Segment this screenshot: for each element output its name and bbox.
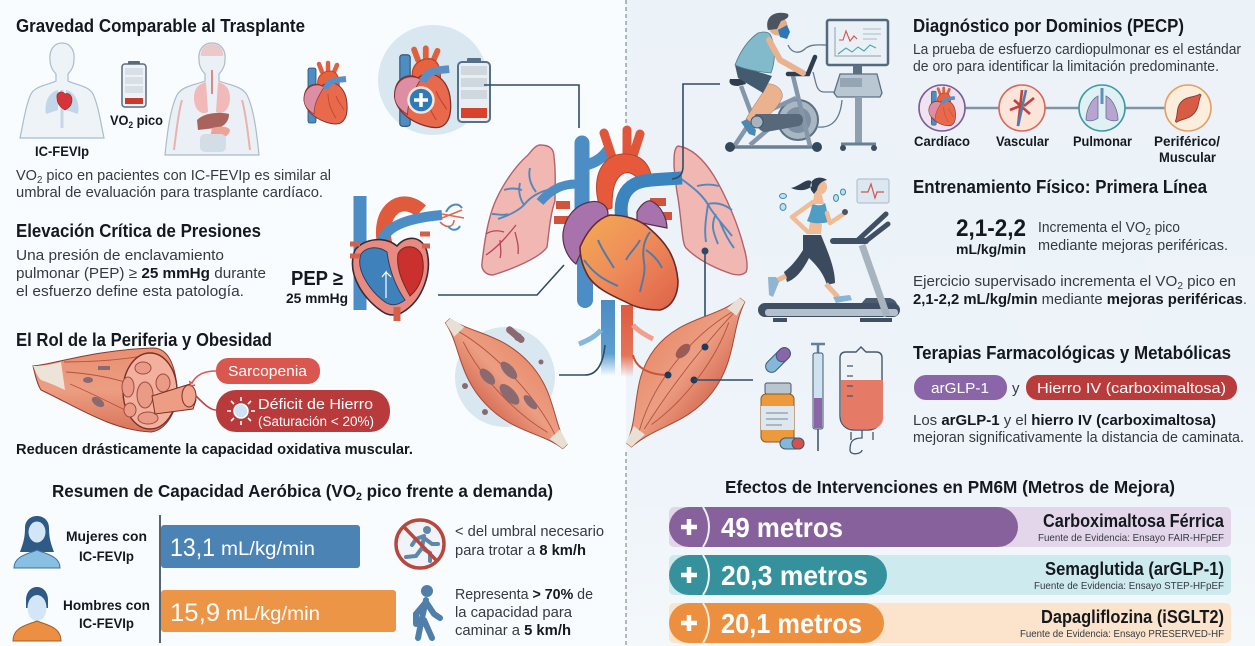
text: VO2 pico descripcion: VO <box>16 167 38 184</box>
panel: terapias farmacologicas <box>913 343 1244 446</box>
panel: resumen capacidad aerobica <box>13 481 604 643</box>
bar: hombres 15,9: mL/kg/min <box>226 604 320 625</box>
label: VO2 pico: pico <box>133 112 163 128</box>
label: hombres: IC-FEVIp <box>79 615 134 631</box>
panel: efectos de intervenciones <box>669 477 1231 643</box>
text: line 1: Una presión de enclavamiento <box>16 247 224 264</box>
row: carboximaltosa: 49 metros <box>721 512 843 543</box>
text: incrementa: Incrementa el VO <box>1038 219 1155 236</box>
icon: body with organs <box>165 43 259 155</box>
heading: elevacion: Elevación Crítica de Presiones <box>16 221 261 241</box>
text: representa: caminar a 5 km/h <box>455 622 571 639</box>
icon: low battery <box>122 61 146 107</box>
text: umbral trotar <box>455 523 604 559</box>
row: semaglutida: Fuente de Evidencia: Ensayo STEP-HFpEF <box>1034 580 1224 592</box>
stat: 2,1-2,2 <box>956 215 1026 257</box>
connector: left muscle to vessel <box>559 345 605 375</box>
icon: no running <box>396 520 444 568</box>
coronary vessels <box>584 232 662 292</box>
icon: small heart <box>304 63 347 124</box>
label: vascular: Vascular <box>996 134 1050 149</box>
text: terapias line 1: Los arGLP-1 y el hierro IV (carboximaltosa) <box>913 412 1216 429</box>
monitor <box>827 20 888 65</box>
pill: sarcopenia <box>216 358 320 384</box>
text: ejercicio supervisado: pico en <box>1183 273 1236 290</box>
stat: 2,1-2,2: 2,1-2,2 <box>956 215 1026 242</box>
label: periferico <box>1154 134 1220 165</box>
icon: man avatar <box>13 587 61 641</box>
stat: 2,1-2,2: mL/kg/min <box>956 241 1026 257</box>
illustration: treadmill runner <box>758 178 900 320</box>
pill: deficit de hierro: Déficit de Hierro <box>258 396 373 413</box>
text: line 3: el esfuerzo define esta patología. <box>16 283 244 300</box>
atria <box>563 202 608 264</box>
label: VO2 pico: 2 <box>129 120 133 130</box>
connectors with bullets <box>672 84 720 179</box>
domain connector line <box>965 107 1165 109</box>
pill: hierro IV: Hierro IV (carboximaltosa) <box>1037 380 1226 397</box>
text: ejercicio supervisado <box>913 273 1247 308</box>
row: dapagliflozina <box>669 603 1231 643</box>
heading: gravedad: Gravedad Comparable al Trasplante <box>16 16 305 36</box>
descending vessels <box>601 300 615 376</box>
lung right <box>674 146 747 275</box>
illustration: central heart and lungs <box>482 84 747 377</box>
icon: left muscle medallion <box>426 300 588 466</box>
icon: periferico <box>1165 85 1211 131</box>
text: representa <box>455 586 593 639</box>
vessels in lungs <box>492 168 734 248</box>
bar: mujeres 13,1 <box>161 525 360 568</box>
bar: hombres 15,9 <box>161 590 396 632</box>
text: umbral trotar: < del umbral necesario <box>455 523 604 540</box>
icon: woman avatar <box>14 516 60 568</box>
connector: right muscle to therapy <box>694 379 753 381</box>
panel: entrenamiento fisico <box>913 177 1247 308</box>
heading: entrenamiento: Entrenamiento Físico: Primera Línea <box>913 177 1208 197</box>
heading: resumen: Resumen de Capacidad Aeróbica (VO <box>52 481 364 501</box>
text: y: y <box>1012 380 1020 397</box>
text: incrementa <box>1038 219 1228 254</box>
panel: rol de la periferia y obesidad <box>16 330 413 458</box>
arrow: sarcopenia <box>190 371 216 386</box>
great vessels <box>577 260 593 300</box>
bike frame <box>730 145 817 149</box>
lung left <box>482 145 555 275</box>
panel: diagnostico por dominios <box>913 16 1241 165</box>
label: 25 mmHg: 25 mmHg <box>286 290 348 306</box>
heading: terapias: Terapias Farmacológicas y Metabólicas <box>913 343 1231 363</box>
text: reducen: Reducen drásticamente la capacidad oxidativa muscular. <box>16 441 413 458</box>
pill: hierro IV <box>1026 375 1237 400</box>
text: ejercicio supervisado: 2,1-2,2 mL/kg/min mediante mejoras periféricas. <box>913 291 1247 308</box>
label: hombres <box>63 597 150 631</box>
row: carboximaltosa: Carboximaltosa Férrica <box>1043 511 1225 531</box>
label: cardiaco: Cardíaco <box>914 134 970 149</box>
text: umbral trotar: para trotar a 8 km/h <box>455 542 586 559</box>
cyclist <box>746 84 782 124</box>
connector: PEP to heart <box>438 265 564 295</box>
text: VO2 pico descripcion: 2 <box>37 175 43 186</box>
text: incrementa: mediante mejoras periféricas. <box>1038 237 1228 254</box>
icon: walking person <box>416 585 440 638</box>
heading: resumen: pico frente a demanda) <box>362 481 553 501</box>
row: semaglutida: Semaglutida (arGLP-1) <box>1045 559 1224 579</box>
label: mujeres: IC-FEVIp <box>79 548 134 564</box>
text: ejercicio supervisado: Ejercicio supervisado incrementa el VO <box>913 273 1175 290</box>
connector: medallion to heart <box>484 85 579 128</box>
icon: muscle cross section <box>33 348 196 432</box>
text: ejercicio supervisado: 2 <box>1177 281 1183 292</box>
text: representa: la capacidad para <box>455 604 573 621</box>
pill: sarcopenia: Sarcopenia <box>228 363 308 380</box>
icon: cardiaco <box>919 85 965 131</box>
icon: right muscle <box>598 276 768 465</box>
pill: deficit de hierro <box>216 390 390 432</box>
text: diagnostico line 2: de oro para identificar la limitación predominante. <box>913 58 1219 75</box>
text: VO2 pico descripcion 2: umbral de evaluación para trasplante cardíaco. <box>16 184 323 201</box>
label: periferico: Muscular <box>1159 150 1217 165</box>
icon: torso with heart <box>20 43 104 138</box>
icon: heart section <box>350 196 464 321</box>
row: semaglutida: 20,3 metros <box>721 560 868 591</box>
text: incrementa: 2 <box>1146 227 1151 238</box>
label: hombres: Hombres con <box>63 597 150 613</box>
heading: diagnostico: Diagnóstico por Dominios (PECP) <box>913 16 1184 36</box>
heading: rol periferia: El Rol de la Periferia y Obesidad <box>16 330 272 350</box>
illustration: cycling test <box>725 13 888 152</box>
pill: arGLP-1: arGLP-1 <box>931 380 989 397</box>
icon: vascular <box>999 85 1045 131</box>
label: VO2 pico: VO <box>110 112 130 128</box>
pill: deficit de hierro: (Saturación < 20%) <box>258 414 374 429</box>
text: representa: Representa > 70% de <box>455 586 593 603</box>
axis <box>159 515 161 643</box>
text: incrementa: pico <box>1151 219 1180 236</box>
row: dapagliflozina: Fuente de Evidencia: Ensayo PRESERVED-HF <box>1020 628 1224 640</box>
label: IC-FEVIp: IC-FEVIp <box>35 143 89 159</box>
illustration: medication icons <box>761 344 883 454</box>
arrow: deficit <box>196 396 216 410</box>
row: semaglutida <box>669 555 1231 595</box>
heading: resumen: 2 <box>356 491 362 503</box>
label: pulmonar: Pulmonar <box>1073 134 1133 149</box>
text: line 2: pulmonar (PEP) ≥ 25 mmHg durante <box>16 265 266 282</box>
bar: hombres 15,9: 15,9 <box>170 599 220 627</box>
label: PEP: PEP ≥ <box>291 268 343 290</box>
bar: mujeres 13,1: 13,1 <box>170 534 215 562</box>
text: VO2 pico descripcion: pico en pacientes con IC-FEVIp es similar al <box>42 167 331 184</box>
row: dapagliflozina: 20,1 metros <box>721 608 862 639</box>
label: periferico: Periférico/ <box>1154 134 1220 149</box>
panel: gravedad comparable al trasplante <box>16 16 347 201</box>
cables <box>788 45 842 127</box>
heading: efectos: Efectos de Intervenciones en PM6M (Metros de Mejora) <box>725 477 1175 497</box>
bar: mujeres 13,1: mL/kg/min <box>221 539 315 560</box>
ventricles <box>580 215 678 310</box>
icon: heart and battery medallion <box>378 25 490 135</box>
icon: pulmonar <box>1079 85 1125 131</box>
text: terapias line 2: mejoran significativamente la distancia de caminata. <box>913 429 1244 446</box>
panel: elevacion critica de presiones <box>16 196 464 321</box>
label: mujeres: Mujeres con <box>66 528 147 544</box>
label: mujeres <box>66 528 147 564</box>
runner <box>784 235 835 285</box>
row: dapagliflozina: Dapagliflozina (iSGLT2) <box>1041 607 1224 627</box>
pill: arGLP-1 <box>914 375 1007 400</box>
row: carboximaltosa: Fuente de Evidencia: Ensayo FAIR-HFpEF <box>1038 532 1224 544</box>
row: carboximaltosa <box>669 507 1231 547</box>
